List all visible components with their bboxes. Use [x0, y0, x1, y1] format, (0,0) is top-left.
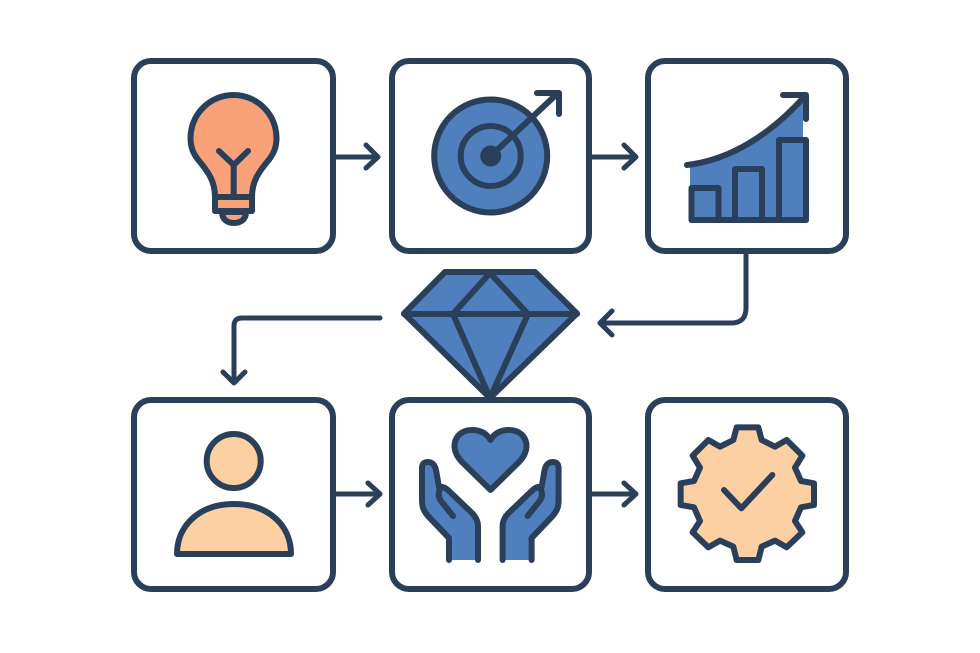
arrow: chart to diamond: [600, 254, 746, 335]
icon: heart: [455, 430, 526, 490]
icon: left hand: [422, 462, 478, 560]
icon: diamond: [404, 272, 577, 398]
panel: gear check: [648, 400, 846, 589]
panel: growth chart: [648, 61, 846, 251]
panel: person: [134, 400, 333, 589]
arrow: care to gear: [592, 483, 636, 505]
icon: rising bar chart: [687, 95, 806, 220]
icon: gear with check mark: [681, 427, 814, 560]
panel: care: [392, 400, 589, 589]
icon: person: [177, 434, 291, 554]
icon: light bulb: [190, 95, 276, 223]
icon: target with arrow: [434, 93, 559, 212]
panel: target: [392, 61, 589, 251]
arrow: target to chart: [592, 145, 636, 168]
panel: idea: [134, 61, 333, 251]
arrow: person to care: [336, 483, 380, 505]
arrow: diamond to person: [223, 318, 380, 383]
arrow: idea to target: [336, 145, 378, 168]
icon: right hand: [503, 462, 559, 560]
